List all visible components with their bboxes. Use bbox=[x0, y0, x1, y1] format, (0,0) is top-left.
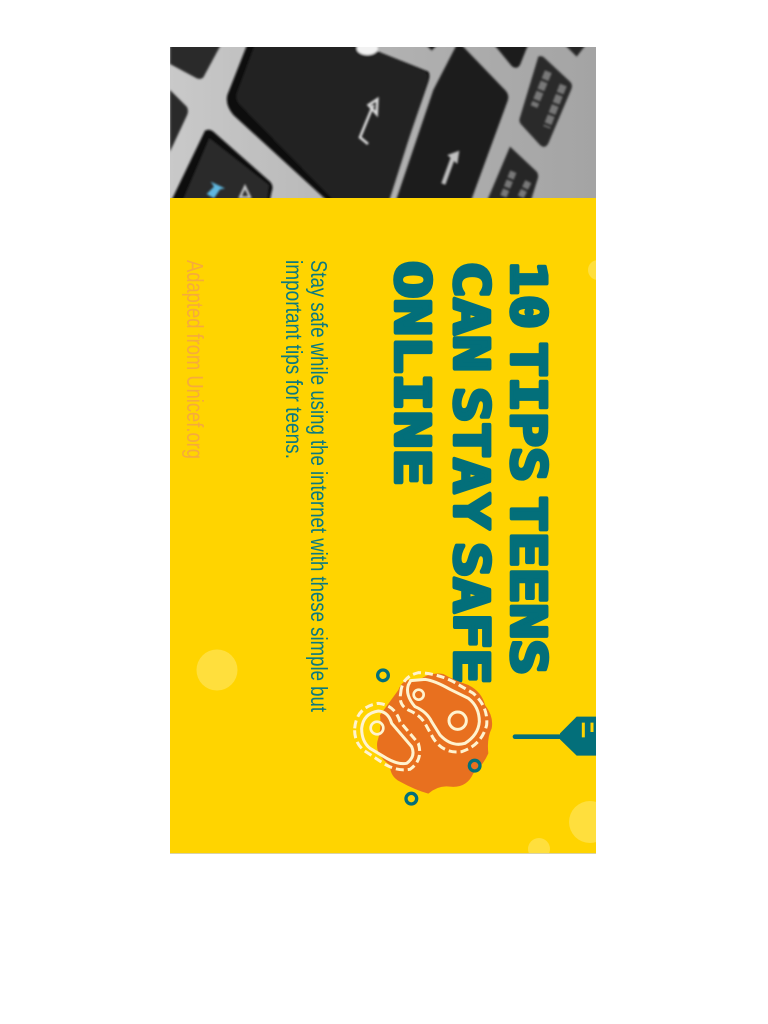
title: TIPS bbox=[500, 342, 556, 482]
icon: plug connector bbox=[515, 717, 596, 756]
icon: key arrows bbox=[207, 72, 563, 198]
infographic rotated page bbox=[170, 47, 596, 854]
title: 10 bbox=[500, 261, 556, 329]
subtitle text: important tips for teens. bbox=[281, 260, 307, 459]
title: ONLINE bbox=[384, 261, 440, 486]
icon: orange blob with chain link bbox=[355, 670, 492, 804]
panel: yellow background bbox=[170, 198, 596, 853]
title: CAN bbox=[442, 261, 498, 372]
title: SAFE bbox=[442, 542, 498, 684]
title: STAY bbox=[442, 387, 498, 529]
photo: laptop keyboard bbox=[170, 42, 596, 203]
subtitle text: Stay safe while using the internet with these simple but bbox=[306, 260, 332, 712]
title: TEENS bbox=[500, 496, 556, 675]
title bbox=[384, 261, 556, 684]
icon: small rings bbox=[378, 670, 480, 804]
source credit: Adapted from Unicef.org bbox=[182, 260, 208, 459]
decorative pale circles bbox=[196, 260, 611, 860]
subtitle text bbox=[281, 260, 332, 712]
